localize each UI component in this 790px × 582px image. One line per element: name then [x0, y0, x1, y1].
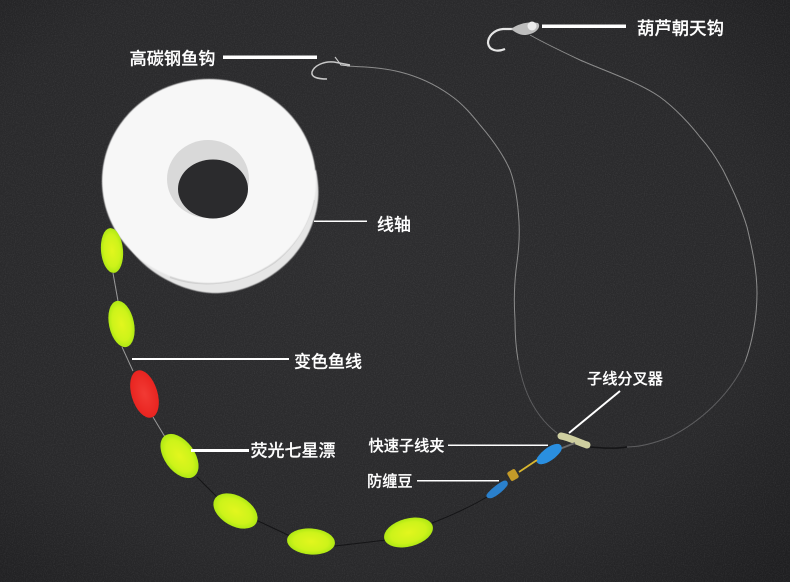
float 3 red: [125, 367, 164, 421]
label: luminous floats: [191, 442, 336, 460]
line spool: [102, 79, 318, 293]
label: high carbon steel hook: [130, 48, 317, 68]
label: anti-tangle bead: 防缠豆: [367, 472, 413, 490]
label: quick clip: 快速子线夹: [368, 438, 444, 455]
label: branch splitter: [569, 371, 663, 433]
floats: luminous seven-star floats: [99, 227, 436, 556]
label: spool: 线轴: [377, 216, 411, 234]
label: luminous floats: 荧光七星漂: [250, 442, 336, 460]
branch splitter and quick clip: [519, 436, 587, 472]
float 7: [381, 513, 436, 552]
label: colour-changing line: 变色鱼线: [294, 352, 362, 372]
anti-tangle bead: [486, 468, 519, 498]
float 2: [104, 298, 139, 350]
label: spool: [314, 216, 411, 234]
label: anti-tangle bead: [367, 472, 499, 490]
float 5: [207, 486, 264, 536]
float 4: [153, 427, 206, 485]
icon: upward-facing jig hook: [488, 22, 539, 51]
label: upward-facing hook: [542, 18, 724, 38]
label: branch splitter: 子线分叉器: [587, 371, 663, 388]
label: upward-facing hook: 葫芦朝天钩: [637, 18, 724, 38]
float 6: [286, 527, 336, 556]
fishing line: main line: [113, 35, 757, 546]
float 1: [99, 227, 125, 274]
label: high carbon steel hook: 高碳钢鱼钩: [130, 48, 215, 68]
icon: high carbon steel hook: [312, 57, 350, 79]
